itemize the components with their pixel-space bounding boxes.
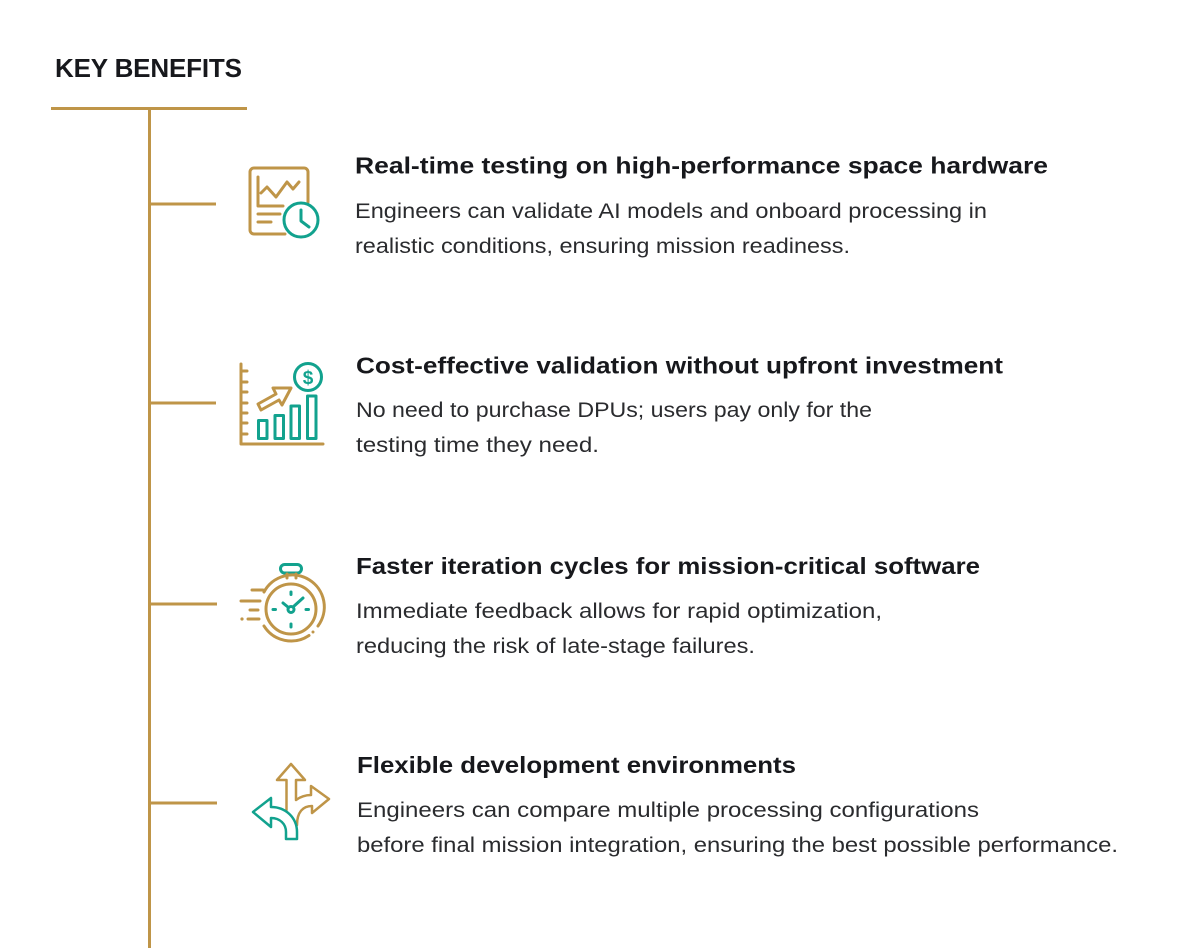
body 3 (356, 600, 882, 658)
heading 2: Cost-effective validation without upfront investment (356, 352, 1003, 378)
timeline (51, 107, 247, 948)
body 1: realistic conditions, ensuring mission readiness. (355, 235, 850, 258)
body 4 (357, 799, 1118, 857)
icon: growth chart with dollar (241, 364, 323, 444)
heading 3: Faster iteration cycles for mission-critical software (356, 553, 980, 579)
icon: growth chart with dollar: $ (303, 368, 314, 389)
heading 4: Flexible development environments (357, 752, 796, 778)
body 3: reducing the risk of late-stage failures. (356, 635, 755, 658)
heading 1: Real-time testing on high-performance space hardware (355, 152, 1048, 178)
icon: report with clock (250, 168, 318, 237)
body 2: testing time they need. (356, 434, 599, 457)
body 1 (355, 200, 987, 258)
body 4: Engineers can compare multiple processing configurations (357, 799, 979, 822)
body 3: Immediate feedback allows for rapid optimization, (356, 600, 882, 623)
body 2 (356, 399, 872, 457)
title: KEY BENEFITS (55, 53, 242, 83)
icon: stopwatch (240, 564, 324, 641)
body 2: No need to purchase DPUs; users pay only for the (356, 399, 872, 422)
icon: diverging arrows (253, 764, 329, 839)
body 4: before final mission integration, ensuring the best possible performance. (357, 834, 1118, 857)
body 1: Engineers can validate AI models and onboard processing in (355, 200, 987, 223)
